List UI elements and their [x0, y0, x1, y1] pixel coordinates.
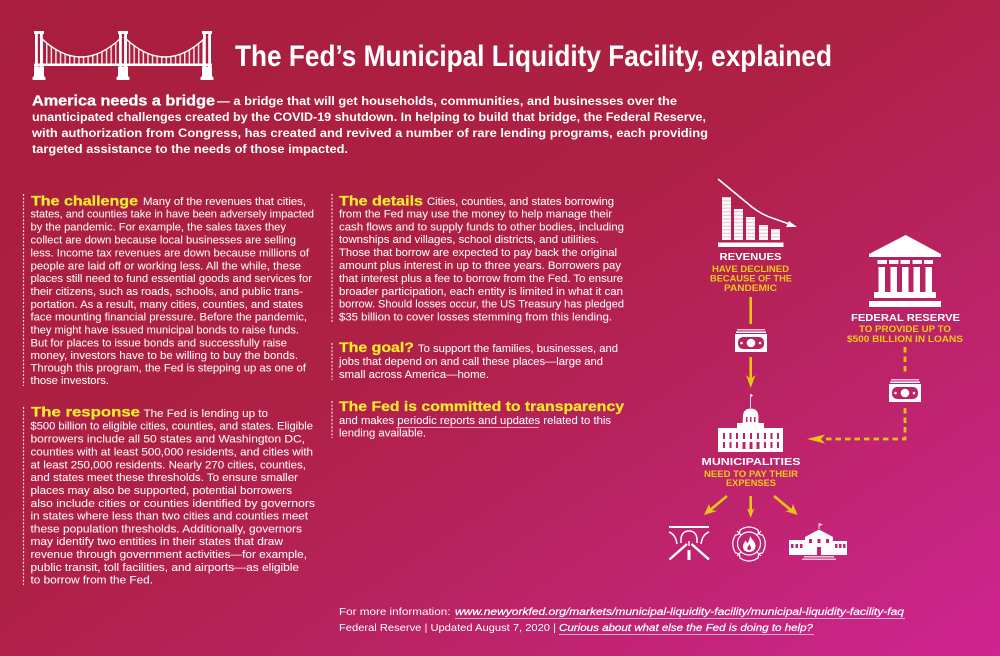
text block: the challenge — [24, 194, 314, 387]
footer: sources and links — [339, 607, 905, 634]
label: revenues: BECAUSE OF THE — [710, 274, 792, 284]
text block: the challenge: Through this program, the Fed is stepping up as one of — [30, 362, 307, 374]
text block: the response: and states meet these thresholds. To ensure smaller — [30, 472, 298, 484]
label: municipalities — [702, 457, 801, 488]
text block: the challenge: collect are down because local businesses are selling — [30, 234, 296, 246]
text block: transparency: lending available. — [339, 428, 426, 440]
text block: the goal: jobs that depend on and call these places—large and — [338, 356, 603, 368]
text block: the details: borrow. Should losses occur, the US Treasury has pledged — [339, 298, 624, 310]
arrow: money to municipalities — [746, 357, 756, 388]
label: revenues — [710, 252, 792, 293]
icon: declining revenue bar chart — [718, 179, 797, 247]
text block: the response: to borrow from the Fed. — [30, 574, 153, 586]
text block: the challenge: those investors. — [30, 375, 109, 387]
text block: the response: $500 billion to eligible cities, counties, and states. Eligible — [30, 420, 313, 432]
intro text block: — a bridge that will get households, communities, and businesses over the — [217, 94, 677, 108]
text block: the details: townships and villages, school districts, and utilities. — [339, 234, 599, 246]
label: federal reserve: $500 BILLION IN LOANS — [847, 334, 963, 344]
text block: the challenge: places still need to fund essential goods and services for — [30, 273, 312, 285]
text block: the details: that interest plus a fee to borrow from the Fed. To ensure — [339, 273, 623, 285]
title: The Fed’s Municipal Liquidity Facility, explained — [235, 40, 832, 73]
text block: the goal: small across America—home. — [339, 369, 489, 381]
text block: the response: The Fed is lending up to — [144, 408, 268, 420]
label: revenues: REVENUES — [720, 252, 782, 263]
label: municipalities: MUNICIPALITIES — [702, 457, 801, 468]
text block: the details: The details — [339, 194, 423, 208]
text block: the details: from the Fed may use the money to help manage their — [339, 208, 612, 220]
intro text block — [31, 94, 708, 156]
text block: the response: places may also be supported, potential borrowers — [30, 485, 293, 497]
arrow: revenues to money — [749, 297, 752, 324]
icon: federal reserve building — [869, 235, 941, 307]
label: revenues: HAVE DECLINED — [712, 264, 789, 274]
label: revenues: PANDEMIC — [724, 283, 778, 293]
footer: sources and links: For more information: — [339, 607, 450, 618]
arrow: to road — [704, 496, 727, 515]
label: municipalities: NEED TO PAY THEIR — [704, 469, 799, 479]
text block: the goal: The goal? — [339, 340, 414, 355]
text block: the details: cash flows and to supply funds to other bodies, including — [339, 222, 624, 234]
text block: the challenge: less. Income tax revenues are down because millions of — [30, 248, 310, 260]
text block: the response: these population thresholds. Additionally, governors — [30, 524, 303, 536]
arrow: money to municipalities, dashed — [807, 408, 905, 444]
text block: the challenge: The challenge — [31, 194, 139, 208]
text block: the challenge: they might have issued municipal bonds to raise funds. — [30, 324, 299, 336]
text block: the challenge: Many of the revenues that cities, — [143, 196, 306, 208]
text block: the challenge: But for places to issue bonds and successfully raise — [30, 338, 287, 350]
text block: transparency: and makes periodic reports and updates related to this — [339, 415, 612, 427]
text block: the challenge: by the pandemic. For example, the sales taxes they — [30, 222, 287, 234]
arrow: to fire department — [747, 496, 754, 518]
text block: the details — [332, 194, 624, 324]
text block: the response: public transit, toll facilities, and airports—as eligible — [30, 562, 299, 574]
text block: the response: counties with at least 500,000 residents, and cities with — [30, 446, 313, 458]
text block: the challenge: portation. As a result, many cities, counties, and states — [30, 299, 304, 311]
icon: money — [735, 329, 767, 352]
text block: the response: in states where less than two cities and counties meet — [30, 510, 308, 522]
text block: the details: Those that borrow are expected to pay back the original — [339, 247, 617, 259]
text block: the response: borrowers include all 50 states and Washington DC, — [30, 434, 305, 446]
label: municipalities: EXPENSES — [726, 478, 776, 488]
label: federal reserve: TO PROVIDE UP TO — [859, 324, 951, 334]
text block: the response: at least 250,000 residents. Nearly 270 cities, counties, — [30, 460, 306, 472]
intro text block: targeted assistance to the needs of those impacted. — [32, 142, 348, 156]
intro text block: America needs a bridge — [32, 94, 215, 110]
footer: sources and links: www.newyorkfed.org/markets/municipal-liquidity-facility/municipal-liquidity-facility-faq — [455, 607, 904, 618]
text block: the goal: To support the families, businesses, and — [418, 343, 618, 355]
arrow: to school — [774, 496, 798, 515]
label: federal reserve — [847, 313, 963, 344]
text block: the response: also include cities or counties identified by governors — [30, 498, 316, 510]
text block: the response: revenue through government activities—for example, — [30, 549, 307, 561]
label: federal reserve: FEDERAL RESERVE — [851, 313, 961, 324]
text block: the response — [24, 404, 316, 586]
text block: transparency: The Fed is committed to transparency — [339, 399, 625, 414]
intro text block: unanticipated challenges created by the COVID-19 shutdown. In helping to build that bridge, the Federal Reserve, — [32, 110, 706, 124]
footer: sources and links: Federal Reserve | Updated August 7, 2020 | — [339, 623, 556, 634]
icon: fire department emblem — [733, 527, 765, 561]
icon: capitol building — [718, 394, 783, 452]
icon: school building — [789, 523, 847, 560]
text block: the details: Cities, counties, and states borrowing — [427, 196, 614, 208]
text block: the challenge: states, and counties take in have been adversely impacted — [30, 208, 314, 220]
icon: suspension bridge — [32, 31, 214, 80]
text block: the response: may identify two entities in their states that draw — [30, 536, 283, 548]
text block: the details: $35 billion to cover losses stemming from this lending. — [339, 312, 612, 324]
text block: the challenge: face mounting financial pressure. Before the pandemic, — [30, 312, 307, 324]
icon: road and tunnel — [669, 526, 709, 560]
text block: the details: broader participation, each entity is limited in what it can — [339, 286, 623, 298]
text block: the details: amount plus interest in up to three years. Borrowers pay — [339, 260, 622, 272]
text block: the response: The response — [31, 404, 141, 420]
text block: transparency — [332, 399, 625, 440]
intro text block: with authorization from Congress, has created and revived a number of rare lending programs, each providing — [31, 126, 708, 140]
text block: the challenge: their citizens, such as roads, schools, and public trans- — [30, 286, 303, 298]
text block: the goal — [332, 340, 618, 381]
text block: the challenge: people are laid off or working less. All the while, these — [30, 260, 301, 272]
icon: money — [889, 379, 921, 402]
footer: sources and links: Curious about what else the Fed is doing to help? — [559, 623, 813, 634]
text block: the challenge: money, investors have to be willing to buy the bonds. — [30, 350, 298, 362]
arrow: federal reserve to money — [904, 347, 906, 375]
